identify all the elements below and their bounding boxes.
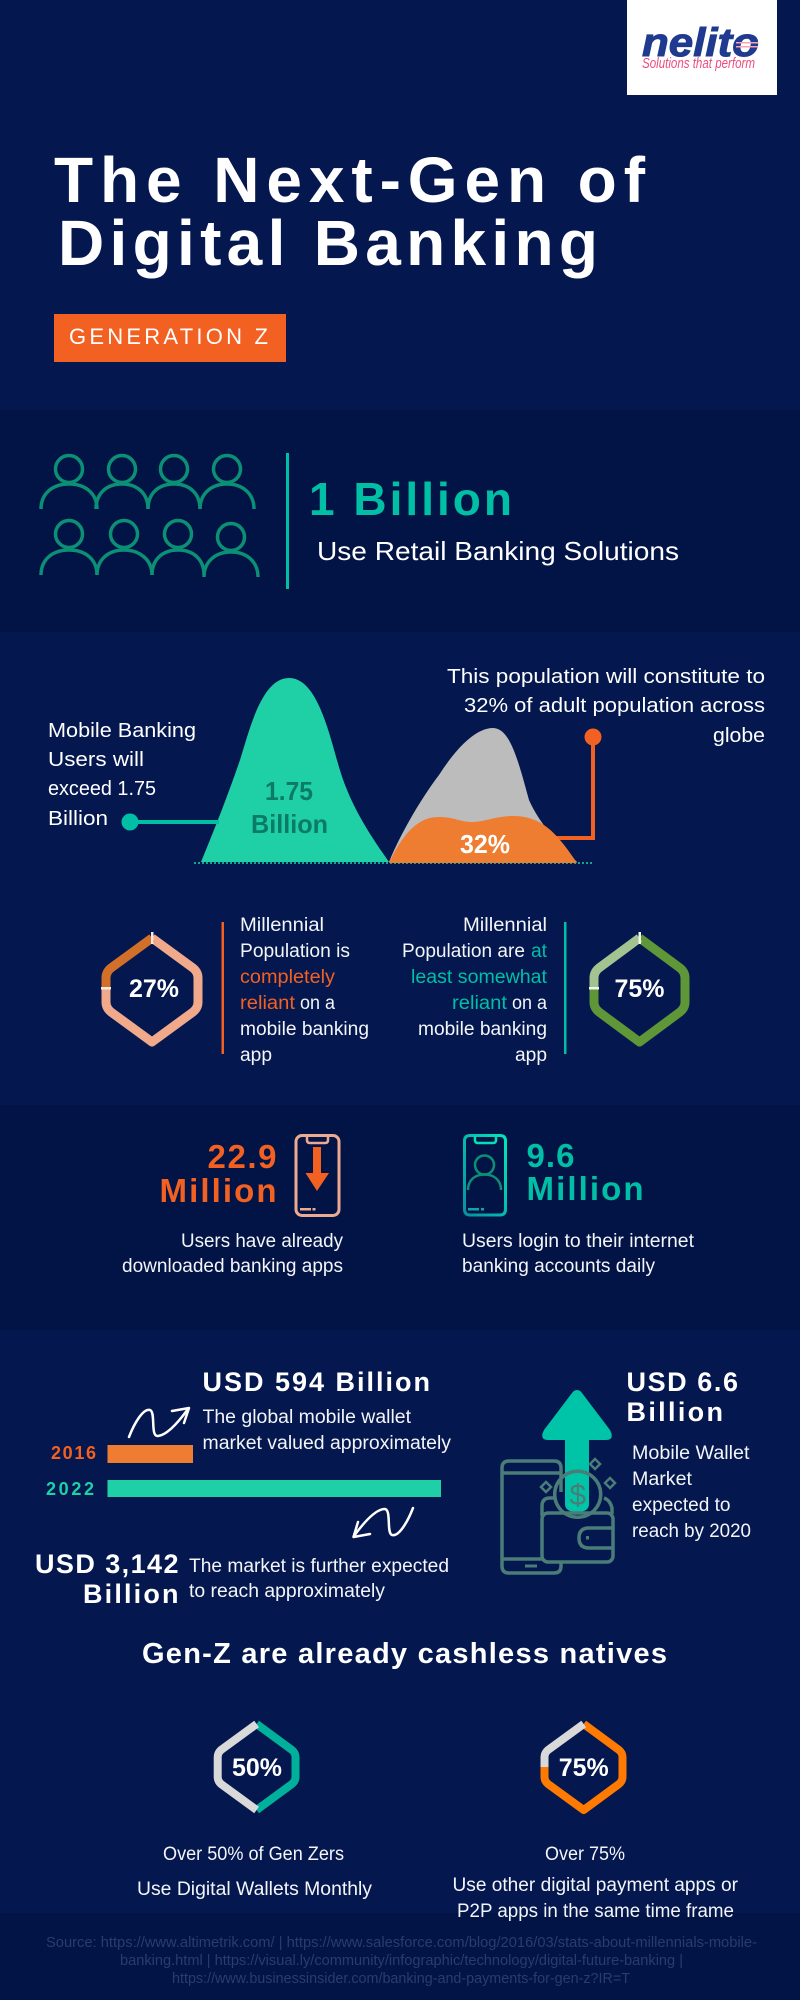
arrow: squiggle up <box>129 1408 189 1437</box>
stat: 9.6 million: Million <box>526 1170 644 1207</box>
heading: usd 6.6 billion <box>626 1367 738 1427</box>
text: completely reliant <box>240 915 369 1066</box>
hexagon: 50 percent <box>218 1724 296 1810</box>
divider: teal <box>564 922 566 1054</box>
logo: Solutions that perform <box>642 55 755 72</box>
hexagon: 50 percent: 50% <box>232 1754 282 1782</box>
stat: 9.6 million: 9.6 <box>526 1137 574 1174</box>
text: completely reliant: on a <box>300 993 335 1014</box>
text: mobile banking users: Billion <box>48 808 108 830</box>
text: completely reliant: Millennial <box>240 915 324 936</box>
icon: wallet with arrow <box>502 1390 615 1573</box>
text: digital wallets: Over 50% of Gen Zers <box>163 1844 344 1865</box>
text: daily logins: banking accounts daily <box>462 1256 655 1277</box>
text: completely reliant: mobile banking <box>240 1019 369 1040</box>
text: mobile banking users: Mobile Banking <box>48 720 196 742</box>
hexagon: 75 percent <box>589 932 685 1042</box>
badge: generation z <box>54 314 286 362</box>
text: global mobile wallet: The global mobile wallet <box>202 1407 412 1428</box>
heading: usd 594 billion: USD 594 Billion <box>202 1367 430 1397</box>
mountain: 32 percent <box>389 728 577 863</box>
text: completely reliant: app <box>240 1045 272 1066</box>
text: mobile banking users: Users will <box>48 749 144 771</box>
text: somewhat reliant <box>402 915 548 1066</box>
text: completely reliant: Population is <box>240 941 350 962</box>
source footer: banking.html | https://visual.ly/community/infographic/technology/digital-future-banking | <box>120 1952 683 1969</box>
text: global mobile wallet <box>202 1407 452 1454</box>
heading: usd 6.6 billion: USD 6.6 <box>626 1367 738 1397</box>
text: somewhat reliant: Millennial <box>463 915 547 936</box>
text: mobile wallet market: Market <box>632 1469 693 1490</box>
text: downloaded apps: Users have already <box>181 1231 343 1252</box>
title <box>54 144 646 279</box>
stat: 1 billion: 1 Billion <box>309 473 512 525</box>
text: global mobile wallet: market valued approximately <box>202 1433 452 1454</box>
text: mobile wallet market: expected to <box>632 1495 730 1516</box>
heading: usd 6.6 billion: Billion <box>626 1397 723 1427</box>
heading: usd 3,142 billion: USD 3,142 <box>35 1549 178 1579</box>
panel: 1 billion <box>41 453 679 589</box>
icon: phone download <box>296 1136 339 1216</box>
text: somewhat reliant: mobile banking <box>418 1019 547 1040</box>
mountain: 1.75 billion: 1.75 <box>265 776 313 806</box>
stat: 9.6 million <box>526 1137 644 1207</box>
text: payment apps: P2P apps in the same time frame <box>457 1901 734 1922</box>
text: retail banking: Use Retail Banking Solutions <box>317 536 679 566</box>
source footer: https://www.businessinsider.com/banking-and-payments-for-gen-z?IR=T <box>172 1970 630 1987</box>
text: somewhat reliant: least somewhat <box>411 967 548 988</box>
title: Digital Banking <box>58 207 598 279</box>
text: mobile banking users: exceed 1.75 <box>48 778 156 800</box>
text: mobile wallet market: Mobile Wallet <box>632 1443 750 1464</box>
icon: wallet with arrow: $ <box>569 1479 586 1512</box>
text: payment apps: Use other digital payment apps or <box>452 1875 739 1896</box>
icon: phone user <box>464 1136 506 1215</box>
chart: market bars <box>46 1443 441 1499</box>
mountain: 1.75 billion: Billion <box>251 809 328 839</box>
connector: orange line <box>556 728 602 838</box>
heading: usd 3,142 billion: Billion <box>83 1579 178 1609</box>
text: somewhat reliant: at <box>531 941 548 962</box>
text: downloaded apps <box>122 1231 343 1277</box>
text: further expected: The market is further expected <box>189 1556 449 1577</box>
text: mobile wallet market: reach by 2020 <box>632 1521 751 1542</box>
stat: 22.9 million: Million <box>160 1172 276 1209</box>
text: daily logins <box>462 1231 695 1277</box>
icon: people group <box>41 456 258 577</box>
text: further expected: to reach approximately <box>189 1581 385 1602</box>
hexagon: 27 percent: 27% <box>129 975 179 1003</box>
text: somewhat reliant: reliant <box>452 993 508 1014</box>
text: digital wallets: Use Digital Wallets Monthly <box>137 1879 372 1900</box>
text: digital wallets <box>137 1844 372 1900</box>
text: adult population: globe <box>713 725 765 747</box>
heading: usd 3,142 billion <box>35 1549 178 1609</box>
text: completely reliant: reliant <box>240 993 296 1014</box>
mountain: 1.75 billion <box>201 678 389 862</box>
stat: 22.9 million: 22.9 <box>208 1138 276 1175</box>
chart: market bars: 2016 <box>51 1443 96 1463</box>
chart: population mountains <box>122 678 602 863</box>
hexagon: 75 percent orange <box>544 1724 622 1810</box>
title: The Next-Gen of <box>54 144 646 216</box>
text: somewhat reliant: Population are <box>402 941 525 962</box>
badge: generation z: GENERATION Z <box>69 324 268 349</box>
text: daily logins: Users login to their internet <box>462 1231 695 1252</box>
mountain: 32 percent: 32% <box>460 829 510 859</box>
logo <box>627 0 777 95</box>
arrow: squiggle down <box>354 1508 413 1537</box>
stat: 22.9 million <box>160 1138 276 1209</box>
source footer <box>46 1934 757 1987</box>
connector: teal line <box>122 814 219 830</box>
text: further expected <box>189 1556 449 1602</box>
logo: nelito <box>642 21 759 65</box>
heading: cashless natives: Gen-Z are already cashless natives <box>142 1638 667 1670</box>
text: completely reliant: completely <box>240 967 336 988</box>
text: mobile banking users <box>48 720 196 830</box>
hexagon: 75 percent orange: 75% <box>559 1754 609 1782</box>
text: mobile wallet market <box>632 1443 751 1542</box>
text: downloaded apps: downloaded banking apps <box>122 1256 343 1277</box>
text: adult population: 32% of adult population across <box>464 695 765 717</box>
text: somewhat reliant: on a <box>512 993 547 1014</box>
text: adult population <box>447 666 765 747</box>
divider: orange <box>222 922 224 1054</box>
source footer: Source: https://www.altimetrik.com/ | https://www.salesforce.com/blog/2016/03/stats-about-millennials-mobile- <box>46 1934 757 1951</box>
text: payment apps <box>452 1844 739 1922</box>
chart: market bars: 2022 <box>46 1479 94 1499</box>
text: payment apps: Over 75% <box>545 1844 625 1865</box>
text: somewhat reliant: app <box>515 1045 547 1066</box>
hexagon: 27 percent <box>101 932 198 1042</box>
text: adult population: This population will constitute to <box>447 666 765 688</box>
hexagon: 75 percent: 75% <box>614 975 664 1003</box>
